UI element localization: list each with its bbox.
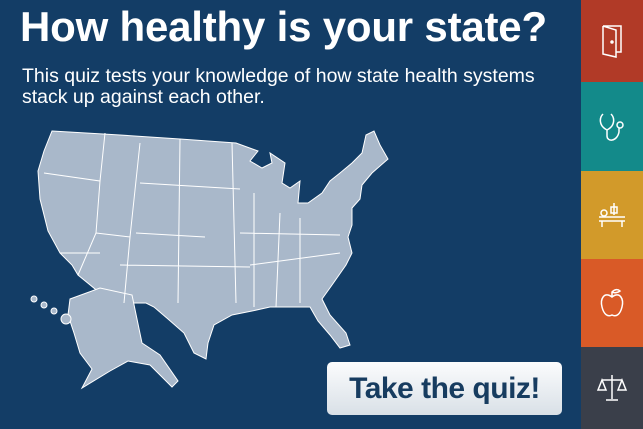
icon block: door	[581, 0, 643, 82]
sidebar	[581, 0, 643, 429]
icon block: hospital bed	[581, 171, 643, 259]
icon block: apple	[581, 259, 643, 347]
icon block: scales	[581, 347, 643, 429]
icon block: stethoscope	[581, 82, 643, 171]
subtitle: This quiz tests your knowledge of how state health systems	[22, 65, 535, 87]
subtitle: stack up against each other.	[22, 86, 265, 108]
button: take the quiz: Take the quiz!	[349, 372, 540, 404]
button: take the quiz	[327, 362, 562, 415]
subtitle	[22, 65, 535, 108]
title: How healthy is your state?	[20, 3, 547, 50]
